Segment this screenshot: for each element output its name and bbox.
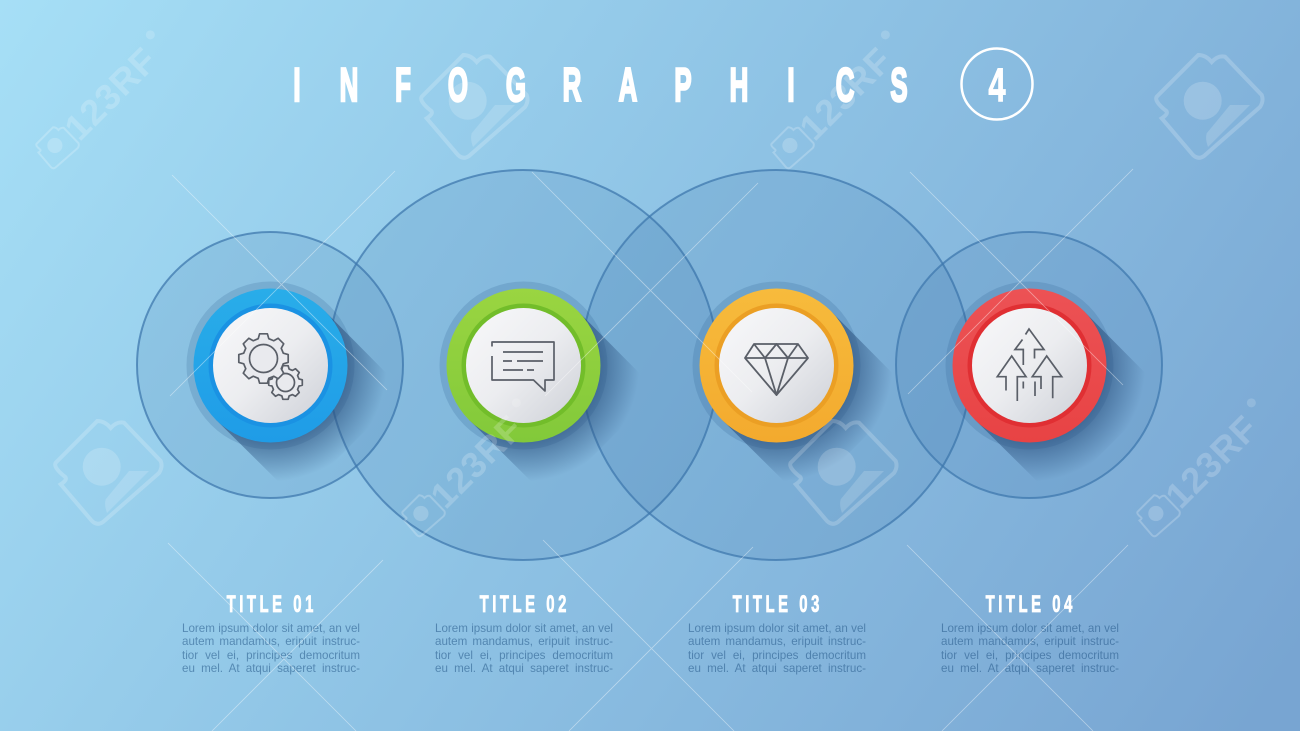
watermark logo 1: 123RF xyxy=(56,40,164,148)
watermark logo 3: 123RF xyxy=(422,408,530,516)
title number badge: 4 xyxy=(988,60,1006,112)
watermark egg 4 xyxy=(790,421,897,524)
circle 3 xyxy=(581,170,971,560)
watermark egg 3 xyxy=(55,421,162,524)
text block 4 xyxy=(941,622,1119,675)
text block 2: Lorem ipsum dolor sit amet, an vel xyxy=(435,622,613,635)
watermark egg 2 xyxy=(1156,55,1263,158)
watermark logo 4: 123RF xyxy=(1157,408,1265,516)
text block 2: tior vel ei, principes democritum xyxy=(435,649,613,662)
heading: title 01: TITLE 01 xyxy=(227,592,313,618)
watermark logo 2 xyxy=(771,27,913,168)
button 4 red with arrows icon xyxy=(946,282,1164,500)
text block 2: autem mandamus, eripuit instruc- xyxy=(435,635,613,648)
watermark logo 1 xyxy=(36,27,178,168)
icon: rising arrows xyxy=(997,329,1062,401)
text block 3 xyxy=(688,622,866,675)
text block 2: eu mel. At atqui saperet instruc- xyxy=(435,662,613,675)
text block 1: Lorem ipsum dolor sit amet, an vel xyxy=(182,622,360,635)
circle 1 xyxy=(137,232,403,498)
heading: title 04: TITLE 04 xyxy=(986,592,1072,618)
text block 1: autem mandamus, eripuit instruc- xyxy=(182,635,360,648)
text block 3: tior vel ei, principes democritum xyxy=(688,649,866,662)
heading: title 02: TITLE 02 xyxy=(480,592,566,618)
text block 1: eu mel. At atqui saperet instruc- xyxy=(182,662,360,675)
text block 4: tior vel ei, principes democritum xyxy=(941,649,1119,662)
watermark logo 4 xyxy=(1137,395,1279,536)
watermark egg 1 xyxy=(421,55,528,158)
watermark logo 3 xyxy=(402,395,544,536)
text block 4: Lorem ipsum dolor sit amet, an vel xyxy=(941,622,1119,635)
circle 2 xyxy=(328,170,718,560)
icon: gears xyxy=(239,334,302,399)
text block 4: autem mandamus, eripuit instruc- xyxy=(941,635,1119,648)
title letters: INFOGRAPHICS xyxy=(293,60,908,112)
title xyxy=(293,48,1032,120)
circle 4 xyxy=(896,232,1162,498)
button 1 blue with gears icon xyxy=(186,282,404,500)
button 2 green with speech bubble icon xyxy=(440,282,658,500)
text block 1 xyxy=(182,622,360,675)
icon: diamond xyxy=(745,344,808,395)
button 3 orange with diamond icon xyxy=(692,282,910,500)
icon: speech bubble xyxy=(492,342,554,391)
text block 2 xyxy=(435,622,613,675)
text block 3: Lorem ipsum dolor sit amet, an vel xyxy=(688,622,866,635)
title number badge xyxy=(962,48,1032,120)
heading: title 03: TITLE 03 xyxy=(733,592,819,618)
watermark logo 2: 123RF xyxy=(791,40,899,148)
text block 1: tior vel ei, principes democritum xyxy=(182,649,360,662)
text block 3: eu mel. At atqui saperet instruc- xyxy=(688,662,866,675)
text block 4: eu mel. At atqui saperet instruc- xyxy=(941,662,1119,675)
text block 3: autem mandamus, eripuit instruc- xyxy=(688,635,866,648)
